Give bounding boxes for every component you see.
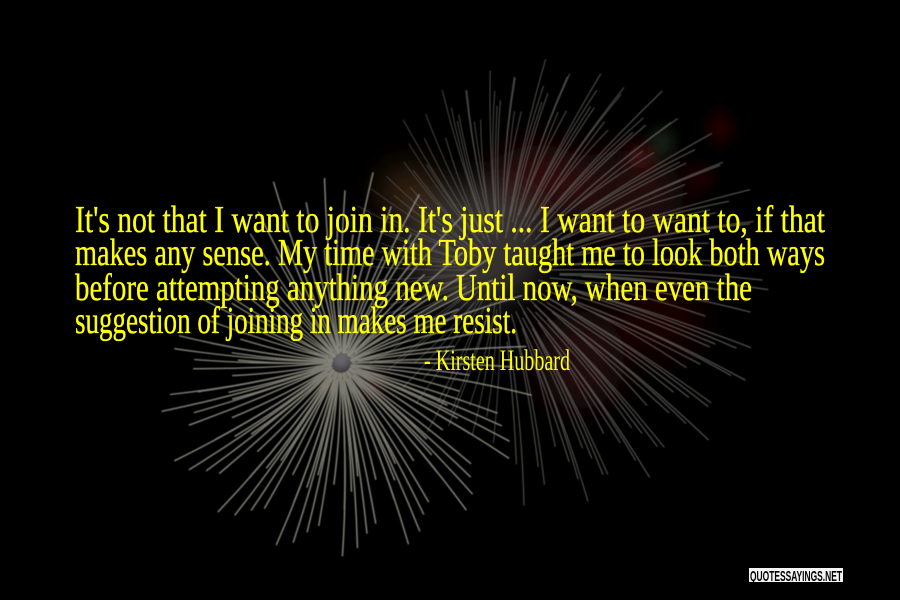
- attribution: - Kirsten Hubbard: [424, 344, 570, 377]
- small blurred lights: [319, 111, 733, 394]
- quote text: suggestion of joining in makes me resist.: [75, 300, 517, 342]
- upper firework burst: [345, 58, 784, 518]
- fireworks photograph: [145, 58, 784, 567]
- red and orange glow: [380, 145, 705, 410]
- lower firework burst: [145, 159, 545, 567]
- quote text: [75, 199, 825, 342]
- watermark: [749, 568, 843, 585]
